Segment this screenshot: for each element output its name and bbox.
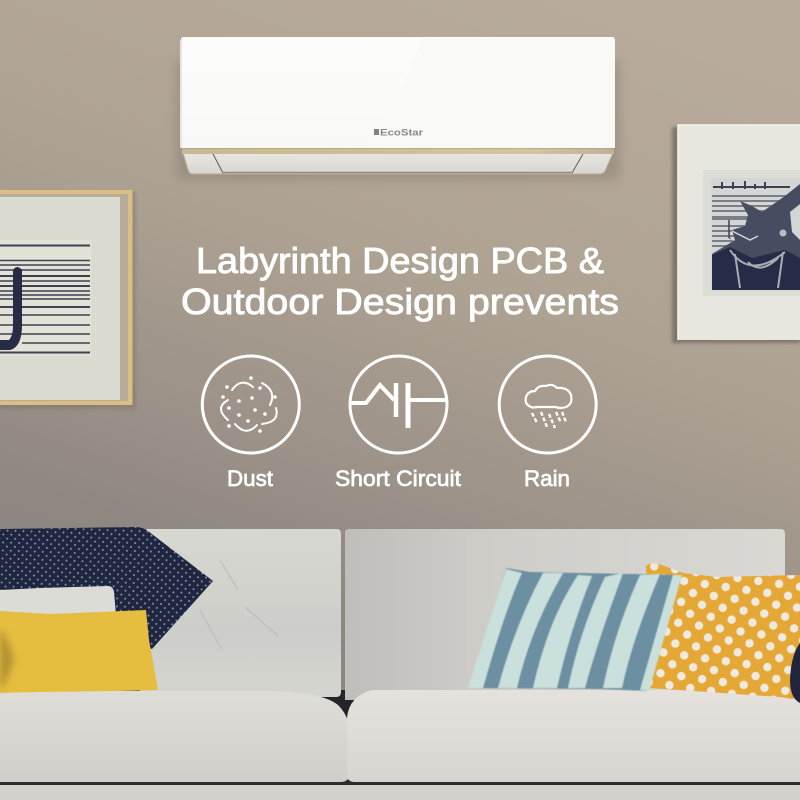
yellow cushion — [0, 610, 158, 693]
orange polka cushion — [646, 563, 800, 700]
icon: dust — [202, 356, 299, 453]
navy throw — [0, 527, 213, 649]
body — [181, 37, 615, 148]
left framed picture — [0, 190, 136, 409]
right framed picture — [672, 125, 800, 343]
icon: short circuit — [350, 356, 447, 453]
label: rain: Rain — [524, 466, 570, 491]
brand logo: EcoStar — [380, 128, 424, 138]
base rail — [0, 785, 800, 800]
blue striped cushion — [468, 568, 682, 691]
flap — [183, 153, 613, 174]
heading: Labyrinth Design PCB & — [196, 240, 604, 281]
right print — [711, 178, 800, 290]
sofa — [0, 529, 800, 800]
right back cushion — [345, 529, 785, 700]
label: dust: Dust — [227, 466, 273, 491]
white cushion — [0, 586, 116, 615]
label: short circuit: Short Circuit — [335, 466, 461, 491]
icon: rain — [499, 356, 596, 453]
gold trim — [182, 148, 614, 154]
left print — [0, 240, 91, 356]
left seat cushion — [0, 691, 349, 782]
brand logo — [374, 128, 424, 138]
left back cushion — [140, 529, 341, 697]
right seat cushion — [347, 690, 800, 782]
heading: Outdoor Design prevents — [181, 281, 619, 322]
navy item at right edge — [790, 643, 800, 703]
heading — [181, 240, 619, 322]
air conditioner — [176, 37, 620, 180]
